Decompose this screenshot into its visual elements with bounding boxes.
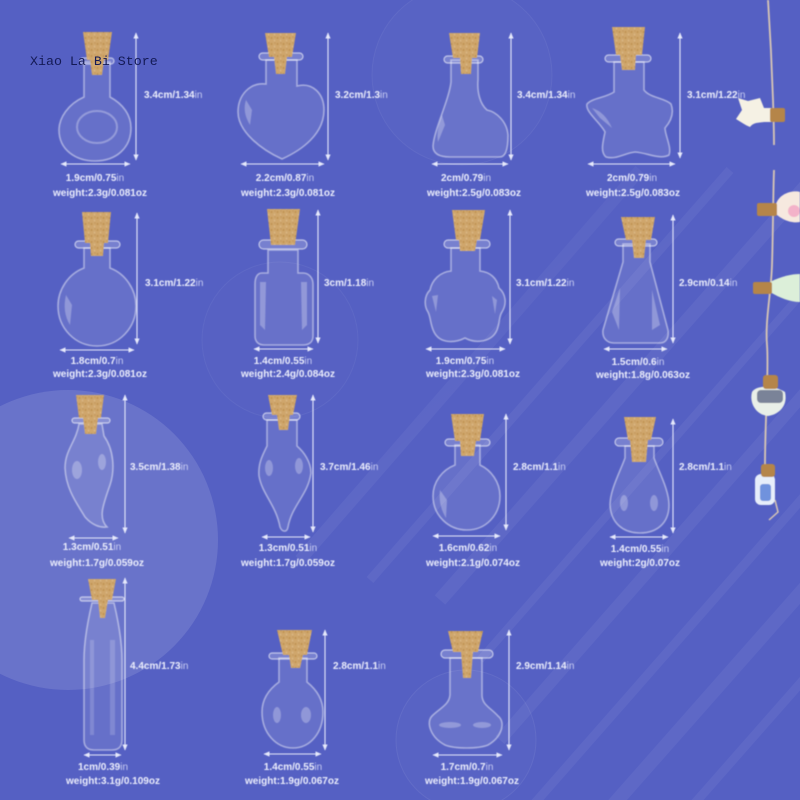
height label: 2.8cm/1.1in: [513, 462, 566, 473]
glass body: [433, 60, 508, 157]
width arrow: [432, 163, 508, 165]
height label: 3cm/1.18in: [324, 278, 374, 289]
width label: 2cm/0.79in: [441, 173, 491, 184]
height label: 3.1cm/1.22in: [145, 278, 203, 289]
weight label: weight:2.3g/0.081oz: [52, 369, 147, 380]
width arrow: [433, 754, 502, 756]
rim: [441, 650, 493, 658]
height label: 3.4cm/1.34in: [517, 90, 575, 101]
highlights: [273, 707, 281, 723]
mini small bottle contents: [760, 484, 771, 501]
mini round bottle contents: [757, 390, 783, 403]
width arrow: [61, 163, 130, 165]
weight label: weight:2.1g/0.074oz: [425, 558, 520, 569]
glass body: [84, 603, 122, 750]
bottle 4: star: [585, 27, 745, 199]
weight label: weight:2.5g/0.083oz: [585, 188, 680, 199]
bottle 7: flower: [425, 210, 574, 380]
glass body: [610, 446, 669, 533]
bottle 5: round: [52, 212, 203, 380]
width label: 1.4cm/0.55in: [611, 544, 669, 555]
mini round cork: [763, 375, 778, 389]
background decoration: large circle bottom left: [0, 390, 218, 690]
mini pink bottle cork: [757, 203, 777, 216]
weight label: weight:1.7g/0.059oz: [49, 558, 144, 569]
rim: [615, 239, 657, 246]
rim: [444, 240, 490, 248]
height arrow: [508, 630, 510, 750]
width arrow: [604, 348, 667, 350]
mini pink bottle: [776, 191, 800, 222]
mini star bottle: [736, 98, 775, 127]
rim: [75, 241, 120, 248]
width label: 1.7cm/0.7in: [441, 762, 493, 773]
glass body: [259, 420, 311, 531]
height arrow: [327, 33, 329, 160]
cork: [268, 395, 297, 430]
height arrow: [505, 414, 507, 530]
glass body: [65, 424, 113, 527]
height label: 2.8cm/1.1in: [679, 462, 732, 473]
cork: [265, 33, 296, 74]
width arrow: [69, 537, 118, 539]
weight label: weight:2.3g/0.081oz: [425, 369, 520, 380]
height label: 2.9cm/1.14in: [516, 661, 574, 672]
glass body: [238, 60, 324, 159]
width arrow: [84, 754, 121, 756]
height label: 2.9cm/0.14in: [679, 278, 737, 289]
cork: [452, 210, 485, 251]
cork: [88, 579, 116, 618]
rim: [615, 438, 663, 446]
width label: 1.6cm/0.62in: [439, 543, 497, 554]
weight label: weight:2.4g/0.084oz: [240, 369, 335, 380]
height label: 3.4cm/1.34in: [144, 90, 202, 101]
glass body: [58, 248, 136, 346]
height label: 3.2cm/1.3in: [335, 90, 388, 101]
height label: 3.7cm/1.46in: [320, 462, 378, 473]
height arrow: [324, 630, 326, 750]
weight label: weight:1.9g/0.067oz: [244, 776, 339, 787]
width label: 1.8cm/0.7in: [71, 356, 123, 367]
width label: 1.9cm/0.75in: [436, 356, 494, 367]
bottle 2: heart: [238, 33, 388, 199]
rim: [269, 653, 317, 659]
highlights: [245, 100, 252, 125]
height label: 3.5cm/1.38in: [130, 462, 188, 473]
mini green bottle: [770, 274, 800, 302]
width arrow: [426, 348, 505, 350]
background decoration: circle top centre: [372, 0, 552, 165]
glass body: [255, 250, 313, 345]
height arrow: [124, 395, 126, 533]
highlights: [260, 282, 266, 330]
width arrow: [588, 163, 675, 165]
cork: [76, 395, 104, 434]
rim: [263, 413, 300, 420]
height arrow: [136, 213, 138, 344]
weight label: weight:2.5g/0.083oz: [426, 188, 521, 199]
height label: 3.1cm/1.22in: [516, 278, 574, 289]
cork: [83, 32, 112, 75]
width arrow: [60, 349, 134, 351]
weight label: weight:1.9g/0.067oz: [424, 776, 519, 787]
bottle 8: conical flask: [595, 215, 737, 381]
width label: 1.4cm/0.55in: [254, 356, 312, 367]
background decoration: circle middle: [202, 262, 358, 418]
height arrow: [672, 419, 674, 533]
width label: 1.5cm/0.6in: [612, 357, 664, 368]
bottle 13: test tube: [65, 578, 188, 787]
mini round bottle: [751, 387, 786, 416]
cork: [612, 27, 645, 70]
string lower: [765, 170, 774, 465]
width arrow: [262, 536, 310, 538]
weight label: weight:1.8g/0.063oz: [595, 370, 690, 381]
bottle 6: square: [240, 209, 374, 380]
mini star cork: [770, 108, 785, 122]
cork: [451, 414, 484, 456]
glass body: [59, 62, 131, 161]
rim: [259, 240, 307, 249]
height arrow: [679, 33, 681, 158]
height label: 4.4cm/1.73in: [130, 661, 188, 672]
cork: [449, 33, 480, 74]
width arrow: [264, 753, 321, 755]
glass body: [262, 658, 323, 748]
cork: [267, 209, 300, 245]
bottle 11: small round: [425, 414, 566, 569]
highlights: [592, 108, 612, 128]
highlights: [620, 495, 628, 511]
glass body: [433, 445, 500, 530]
highlights: [90, 640, 94, 735]
cork: [82, 212, 111, 256]
height arrow: [672, 215, 674, 343]
width label: 2cm/0.79in: [607, 173, 657, 184]
height arrow: [135, 33, 137, 160]
bottle 9: chili: [49, 395, 188, 569]
width arrow: [241, 163, 324, 165]
rim: [444, 56, 483, 63]
width arrow: [433, 535, 500, 537]
height arrow: [312, 395, 314, 532]
tail end of string: [769, 500, 778, 520]
glass body: [587, 62, 672, 158]
weight label: weight:3.1g/0.109oz: [65, 776, 160, 787]
string upper: [768, 0, 774, 145]
bottle 15: flat flask: [424, 630, 574, 787]
width label: 1.9cm/0.75in: [66, 173, 124, 184]
rim: [80, 597, 124, 601]
highlights: [439, 722, 461, 728]
height arrow: [317, 210, 319, 343]
weight label: weight:2.3g/0.081oz: [52, 188, 147, 199]
width arrow: [610, 536, 668, 538]
mini small cork: [761, 464, 775, 477]
highlight: [440, 490, 447, 518]
height label: 2.8cm/1.1in: [333, 661, 386, 672]
bottle 10: teardrop: [240, 395, 378, 569]
hanging string with mini bottles: [736, 0, 800, 520]
weight label: weight:2g/0.07oz: [599, 558, 680, 569]
height arrow: [509, 210, 511, 344]
height arrow: [124, 578, 126, 750]
pink dot: [788, 205, 800, 217]
height label: 3.1cm/1.22in: [687, 90, 745, 101]
width label: 1.4cm/0.55in: [264, 762, 322, 773]
mini green bottle cork: [753, 282, 772, 294]
rim: [605, 55, 651, 62]
cork: [277, 630, 312, 668]
weight label: weight:1.7g/0.059oz: [240, 558, 335, 569]
rim: [80, 58, 114, 64]
background decoration: diagonal stripes: [300, 170, 800, 800]
highlights: [432, 295, 438, 312]
glass body: [429, 658, 502, 748]
cork: [621, 217, 655, 258]
highlights: [612, 288, 620, 330]
width label: 2.2cm/0.87in: [256, 173, 314, 184]
cork: [448, 631, 483, 678]
width label: 1cm/0.39in: [78, 762, 128, 773]
bottle 1: round: [52, 32, 202, 199]
width label: 1.3cm/0.51in: [63, 542, 121, 553]
bottle 14: bulb: [244, 630, 386, 787]
highlight: [65, 295, 72, 325]
highlights: [72, 461, 82, 479]
mini small bottle: [755, 474, 775, 505]
rim: [445, 439, 490, 446]
height arrow: [510, 33, 512, 160]
width arrow: [254, 348, 313, 350]
rim: [259, 53, 303, 60]
bottle 3: boot: [426, 33, 575, 199]
width label: 1.3cm/0.51in: [259, 543, 317, 554]
inner glass swirl: [77, 111, 117, 143]
cork: [624, 417, 656, 462]
store watermark: Xiao La Bi Store: [30, 54, 158, 69]
glass body: [425, 248, 505, 342]
background decoration: circle bottom centre: [396, 670, 536, 800]
weight label: weight:2.3g/0.081oz: [240, 188, 335, 199]
glass body: [603, 244, 668, 343]
highlights: [265, 460, 273, 476]
bottle 12: pear: [599, 417, 732, 569]
rim: [72, 418, 110, 423]
highlight: [438, 115, 445, 142]
